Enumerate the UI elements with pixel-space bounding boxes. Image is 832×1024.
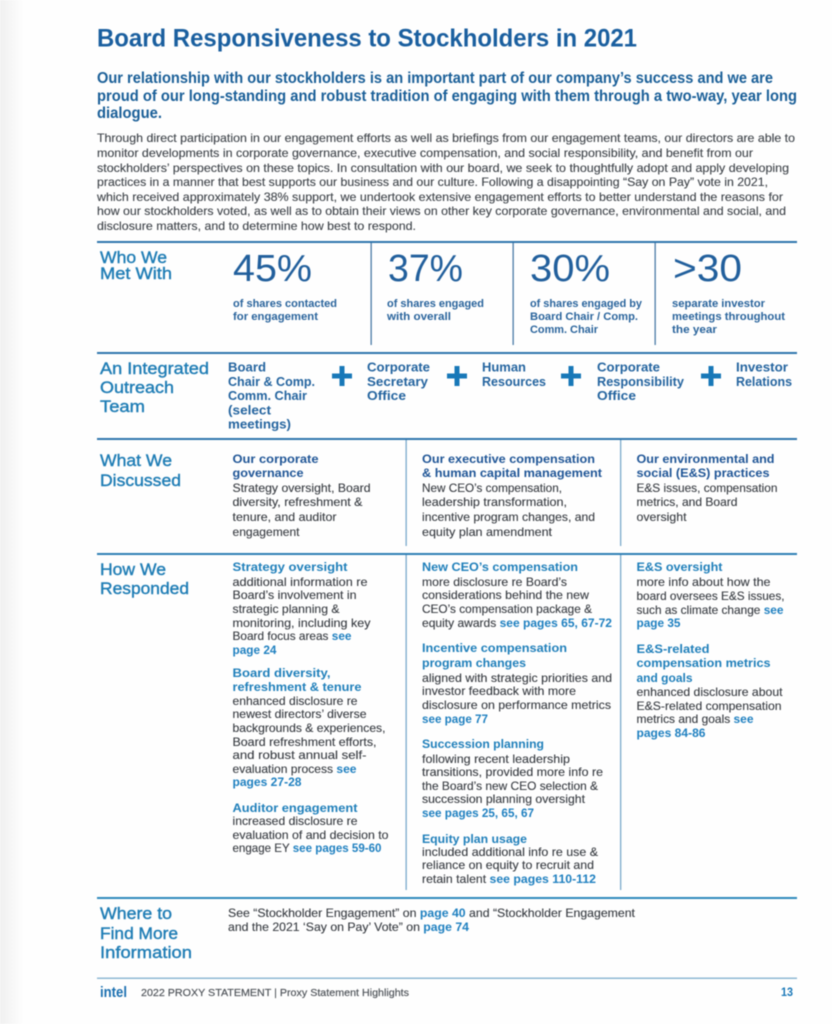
response: board diversity: newest directors’ diverse <box>232 707 367 721</box>
heading: where to find more information: Find More <box>100 924 178 943</box>
response: e&s oversight: E&S oversight <box>636 560 722 574</box>
heading: what we discussed <box>100 451 181 490</box>
response: auditor engagement <box>232 801 389 855</box>
stat: 30% <box>530 248 643 336</box>
heading: what we discussed: Discussed <box>100 471 181 490</box>
panel: who we met with <box>100 243 785 345</box>
response: new ceo compensation: considerations behind the new <box>422 588 589 602</box>
response: succession planning: Succession planning <box>422 737 544 751</box>
response: auditor engagement: increased disclosure re <box>232 814 358 828</box>
response: equity plan usage: reliance on equity to recruit and <box>422 858 594 872</box>
response: board diversity: and robust annual self- <box>232 748 366 762</box>
response: succession planning: succession planning oversight <box>422 792 586 806</box>
team: board chair <box>228 360 315 432</box>
response: board diversity: Board refreshment efforts, <box>232 735 376 749</box>
icon: plus <box>701 366 721 386</box>
response: e&s-related compensation <box>636 642 783 740</box>
stat: 37% <box>386 248 484 323</box>
icon: plus <box>561 366 581 386</box>
heading: who we met with: Who We <box>100 248 167 267</box>
team: human resources <box>482 360 546 389</box>
response: strategy oversight: Strategy oversight <box>232 560 348 574</box>
heading: who we met with <box>100 248 172 283</box>
subheading: Our relationship with our stockholders is an important part of our company’s success and we are <box>97 70 773 87</box>
topic: executive compensation: leadership transformation, <box>422 495 567 509</box>
response: incentive compensation: disclosure on performance metrics <box>422 698 611 712</box>
heading: how we responded <box>100 560 189 598</box>
stat: 45%: 45% <box>233 248 312 290</box>
team: corporate responsibility: Corporate <box>597 360 660 374</box>
topic: executive compensation: & human capital management <box>422 466 602 480</box>
heading: an integrated outreach team: Outreach <box>100 378 174 397</box>
topic: corporate governance: tenure, and auditor <box>232 510 336 524</box>
response: e&s-related compensation: metrics and goals see <box>636 712 754 726</box>
topic: corporate governance: Strategy oversight, Board <box>232 481 370 495</box>
response: board diversity: evaluation process see <box>232 762 357 776</box>
stat: >30: the year <box>672 324 718 336</box>
subheading <box>97 70 797 122</box>
stat: 37%: with overall <box>386 311 451 323</box>
response: incentive compensation: aligned with strategic priorities and <box>422 671 612 685</box>
stat: 30%: 30% <box>530 248 610 290</box>
team: corporate secretary: Corporate <box>367 360 430 374</box>
response: new ceo compensation <box>422 560 612 630</box>
response: board diversity: enhanced disclosure re <box>232 694 358 708</box>
intro paragraph: disclosure matters, and to determine how best to respond. <box>97 219 416 233</box>
response: e&s oversight: page 35 <box>636 616 681 630</box>
stat: 30%: Comm. Chair <box>530 324 599 336</box>
response: succession planning <box>422 737 603 820</box>
heading: where to find more information: Information <box>100 943 192 962</box>
response: strategy oversight: additional information re <box>232 575 368 589</box>
team: human resources: Resources <box>482 375 546 389</box>
topic: corporate governance: diversity, refreshment & <box>232 495 362 509</box>
response: succession planning: transitions, provided more info re <box>422 765 603 779</box>
response: strategy oversight: monitoring, including key <box>232 616 370 630</box>
intro paragraph: which received approximately 38% support, we undertook extensive engagement efforts to better understand the reasons for <box>96 190 783 204</box>
topic: environmental and social: Our environmental and <box>636 452 774 466</box>
response: incentive compensation: program changes <box>422 656 526 670</box>
intro paragraph: monitor developments in corporate governance, executive compensation, and social responsibility, and benefit from our <box>97 146 753 160</box>
team: corporate secretary: Office <box>367 389 406 403</box>
stat: 37%: 37% <box>388 248 463 290</box>
heading: an integrated outreach team <box>100 359 209 416</box>
team: board chair: Comm. Chair <box>228 389 307 403</box>
response: new ceo compensation: CEO’s compensation package & <box>422 602 592 616</box>
topic: environmental and social <box>636 452 778 524</box>
response: equity plan usage: Equity plan usage <box>422 832 527 846</box>
topic: environmental and social: social (E&S) practices <box>636 466 770 480</box>
topic: environmental and social: oversight <box>636 510 687 524</box>
response: e&s oversight: such as climate change see <box>636 603 784 617</box>
response: strategy oversight: page 24 <box>232 643 277 657</box>
intro paragraph: practices in a manner that best supports our business and our culture. Following a disappointing “Say on Pay” vote in 2021, <box>97 175 768 189</box>
response: board diversity: backgrounds & experiences, <box>232 721 386 735</box>
response: strategy oversight <box>232 560 370 657</box>
team: board chair: Board <box>228 360 266 374</box>
response: new ceo compensation: New CEO’s compensation <box>422 560 578 574</box>
team: investor relations: Relations <box>736 375 792 389</box>
panel: where to find more information <box>100 904 636 962</box>
stat: 30%: Board Chair / Comp. <box>530 311 638 323</box>
response: strategy oversight: strategic planning & <box>232 602 340 616</box>
response: e&s oversight: board oversees E&S issues, <box>636 589 784 603</box>
panel: integrated outreach team <box>100 359 792 432</box>
stat: 37%: of shares engaged <box>387 298 484 310</box>
response: e&s-related compensation: E&S-related <box>636 642 710 656</box>
response: e&s oversight <box>636 560 784 630</box>
heading: an integrated outreach team: Team <box>100 397 145 416</box>
heading: what we discussed: What We <box>100 451 172 470</box>
response: e&s-related compensation: E&S-related compensation <box>636 699 782 713</box>
team: corporate secretary: Secretary <box>367 375 428 389</box>
response: incentive compensation: see page 77 <box>422 712 488 726</box>
references text <box>228 906 636 934</box>
heading: an integrated outreach team: An Integrated <box>100 359 209 378</box>
response: e&s oversight: more info about how the <box>636 575 771 589</box>
topic: executive compensation: New CEO’s compensation, <box>422 481 562 495</box>
team: investor relations <box>736 360 792 389</box>
topic: corporate governance <box>232 452 370 539</box>
heading: how we responded: Responded <box>100 579 189 598</box>
response: strategy oversight: Board’s involvement in <box>232 588 356 602</box>
references text: See “Stockholder Engagement” on page 40 and “Stockholder Engagement <box>228 906 636 920</box>
stat: >30: >30 <box>673 248 742 290</box>
team: board chair: meetings) <box>228 418 291 432</box>
team: investor relations: Investor <box>736 360 788 374</box>
topic: executive compensation: incentive program changes, and <box>422 510 595 524</box>
response: incentive compensation: Incentive compensation <box>422 641 567 655</box>
heading: where to find more information <box>100 904 192 962</box>
response: new ceo compensation: more disclosure re Board’s <box>422 575 567 589</box>
team: human resources: Human <box>482 360 526 374</box>
intro paragraph: how our stockholders voted, as well as to obtain their views on other key corporate governance, environmental and social, and <box>97 204 786 218</box>
intro paragraph: Through direct participation in our engagement efforts as well as briefings from our engagement teams, our directors are able to <box>97 131 795 145</box>
subheading: dialogue. <box>97 105 162 122</box>
response: succession planning: the Board’s new CEO selection & <box>422 779 598 793</box>
panel: what we discussed <box>100 440 778 546</box>
topic: executive compensation <box>422 452 602 539</box>
icon: plus <box>332 366 352 386</box>
response: e&s-related compensation: pages 84-86 <box>636 726 706 740</box>
subheading: proud of our long-standing and robust tradition of engaging with them through a two-way, year long <box>97 88 797 105</box>
team: corporate secretary <box>367 360 430 403</box>
team: board chair: Chair & Comp. <box>228 375 315 389</box>
stat: 30%: of shares engaged by <box>530 298 643 310</box>
panel: how we responded <box>100 555 784 890</box>
response: succession planning: see pages 25, 65, 67 <box>422 806 534 820</box>
response: e&s-related compensation: and goals <box>636 671 693 685</box>
response: board diversity <box>232 666 386 789</box>
topic: corporate governance: engagement <box>232 525 300 539</box>
intro paragraph: stockholders’ perspectives on these topics. In consultation with our board, we seek to thoughtfully adopt and apply developing <box>97 161 789 175</box>
response: auditor engagement: Auditor engagement <box>232 801 358 815</box>
response: auditor engagement: evaluation of and decision to <box>232 828 389 842</box>
intel logo: intel <box>100 985 127 1001</box>
stat: 45%: of shares contacted <box>233 298 337 310</box>
stat: >30: meetings throughout <box>672 311 785 323</box>
response: equity plan usage: included additional info re use & <box>422 845 598 859</box>
response: e&s-related compensation: enhanced disclosure about <box>636 685 783 699</box>
response: board diversity: Board diversity, <box>232 666 330 680</box>
response: board diversity: pages 27-28 <box>232 775 302 789</box>
intro paragraph <box>96 131 795 233</box>
references text: and the 2021 ‘Say on Pay’ Vote” on page 74 <box>228 920 469 934</box>
topic: corporate governance: governance <box>232 466 304 480</box>
response: incentive compensation <box>422 641 612 726</box>
heading: who we met with: Met With <box>100 264 172 283</box>
footer text: 2022 PROXY STATEMENT | Proxy Statement Highlights <box>141 987 409 999</box>
response: equity plan usage: retain talent see pages 110-112 <box>422 872 596 886</box>
response: board diversity: refreshment & tenure <box>232 680 362 694</box>
title: Board Responsiveness to Stockholders in 2021 <box>97 24 637 52</box>
stat: 45%: for engagement <box>233 311 318 323</box>
footer <box>100 985 793 1001</box>
team: corporate responsibility: Office <box>597 389 636 403</box>
stat: 45% <box>233 248 337 323</box>
topic: environmental and social: metrics, and Board <box>636 495 738 509</box>
response: new ceo compensation: equity awards see pages 65, 67-72 <box>422 616 612 630</box>
stat: >30 <box>672 248 785 336</box>
page number: 13 <box>781 985 793 999</box>
heading: how we responded: How We <box>100 560 166 579</box>
team: board chair: (select <box>228 404 272 418</box>
icon: plus <box>447 366 467 386</box>
team: corporate responsibility: Responsibility <box>597 375 684 389</box>
response: strategy oversight: Board focus areas see <box>232 629 352 643</box>
topic: corporate governance: Our corporate <box>232 452 319 466</box>
response: succession planning: following recent leadership <box>422 752 570 766</box>
team: corporate responsibility <box>597 360 684 403</box>
response: auditor engagement: engage EY see pages 59-60 <box>232 841 382 855</box>
stat: >30: separate investor <box>672 298 766 310</box>
topic: executive compensation: equity plan amendment <box>422 525 553 539</box>
response: e&s-related compensation: compensation metrics <box>636 656 771 670</box>
topic: executive compensation: Our executive compensation <box>422 452 595 466</box>
heading: where to find more information: Where to <box>100 904 172 923</box>
response: incentive compensation: investor feedback with more <box>422 684 576 698</box>
response: equity plan usage <box>422 832 598 886</box>
topic: environmental and social: E&S issues, compensation <box>636 481 778 495</box>
